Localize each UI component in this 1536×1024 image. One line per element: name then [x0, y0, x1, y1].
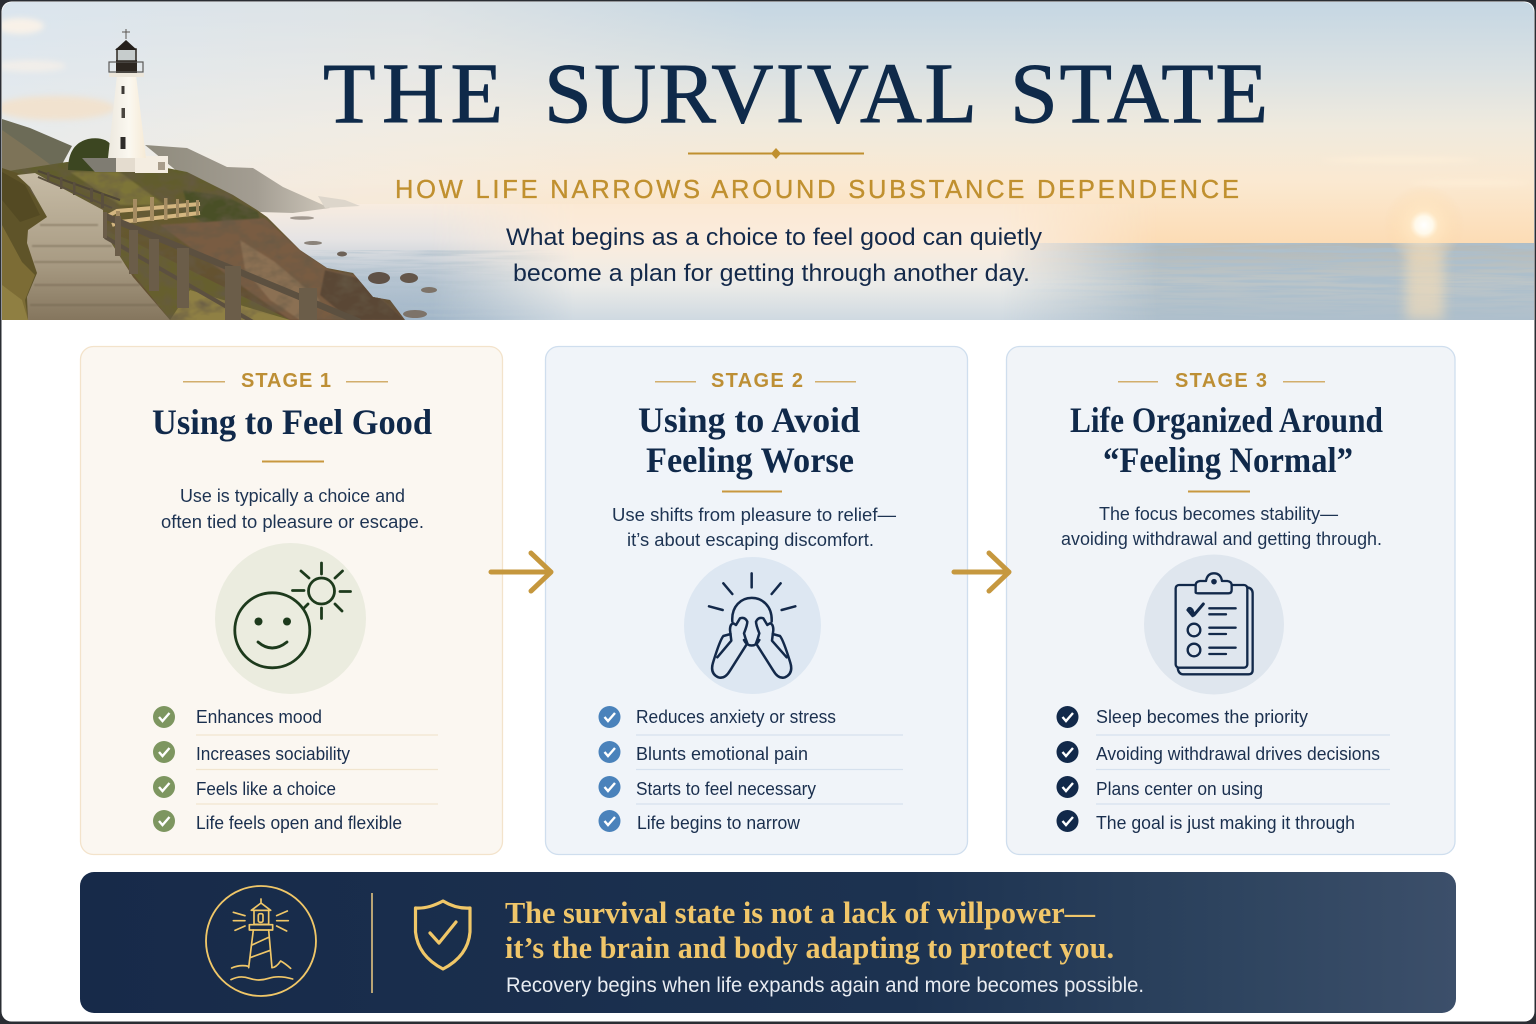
clouds: [2, 16, 114, 122]
stage 2 checklist: Starts to feel necessary: [636, 779, 816, 799]
stage 3 heading: [1070, 400, 1383, 480]
stage 3 description: [1061, 504, 1382, 549]
arrow: stage 2 to stage 3: [954, 553, 1009, 591]
panel: stage 1: [80, 346, 502, 854]
stage 2 checklist: Blunts emotional pain: [636, 744, 808, 764]
subtitle: HOW LIFE NARROWS AROUND SUBSTANCE DEPENDENCE: [395, 176, 1239, 204]
main cliff: [0, 160, 420, 320]
stage 3 checklist: [1056, 706, 1390, 833]
lighthouse: [82, 29, 168, 173]
sea, pale centre: [452, 204, 1143, 320]
intro text: What begins as a choice to feel good can quietly: [506, 224, 1043, 251]
stage 3 heading: Life Organized Around: [1070, 400, 1383, 440]
stage 3 description: The focus becomes stability—: [1099, 504, 1338, 524]
stage 1 heading: Using to Feel Good: [152, 402, 432, 442]
stage 3 heading: “Feeling Normal”: [1103, 440, 1353, 480]
stage 1 description: Use is typically a choice and: [180, 486, 405, 506]
title: THE: [323, 45, 503, 141]
sea, left bay: [264, 204, 562, 320]
stage 1 checklist: Feels like a choice: [196, 779, 336, 799]
icon: clipboard checklist: [1144, 554, 1284, 694]
tree: [68, 138, 112, 172]
stage 2 description: Use shifts from pleasure to relief—: [612, 505, 896, 525]
lit grass: [70, 172, 165, 205]
distant headlands: [145, 145, 330, 213]
icon: lighthouse badge: [206, 886, 316, 996]
stage 3 checklist: The goal is just making it through: [1096, 813, 1355, 833]
stage 2 label: STAGE 2: [711, 370, 803, 392]
stage 2 description: [612, 505, 896, 550]
stage 1 description: [161, 486, 424, 532]
callout headline: it’s the brain and body adapting to protect you.: [505, 930, 1114, 965]
stage 3 checklist: Sleep becomes the priority: [1096, 707, 1308, 727]
title: SURVIVAL: [544, 45, 977, 141]
icon: head held in hands: [684, 557, 821, 694]
stage 1 description: often tied to pleasure or escape.: [161, 512, 424, 532]
stage 3 label: STAGE 3: [1175, 370, 1267, 392]
stage 3 checklist: Avoiding withdrawal drives decisions: [1096, 744, 1380, 764]
stage 2 checklist: Life begins to narrow: [637, 813, 801, 833]
callout subtext: Recovery begins when life expands again and more becomes possible.: [506, 974, 1144, 997]
fence: [38, 171, 360, 322]
panel: stage 2: [546, 346, 968, 854]
stage 2 checklist: [598, 706, 903, 833]
stage 3 description: avoiding withdrawal and getting through.: [1061, 529, 1382, 549]
callout banner: [80, 872, 1456, 1013]
callout headline: The survival state is not a lack of willpower—: [505, 895, 1096, 930]
offshore rocks: [290, 216, 437, 318]
divider: [371, 893, 373, 993]
sun and reflection: [1406, 250, 1444, 320]
hero photo: lighthouse on coastal cliff at sunset: [0, 0, 1536, 322]
stage 2 heading: [638, 400, 860, 480]
title: STATE: [1010, 45, 1268, 141]
icon: shield with check: [416, 901, 470, 969]
grass under fence: [121, 246, 288, 320]
stage 1 checklist: Increases sociability: [196, 744, 350, 764]
rock faces: [162, 218, 381, 320]
intro text: become a plan for getting through another day.: [513, 260, 1030, 287]
path: [17, 173, 170, 320]
sea, right: [1016, 243, 1534, 320]
callout headline: [505, 895, 1114, 965]
stage 1 checklist: Life feels open and flexible: [196, 813, 402, 833]
stage 3 checklist: Plans center on using: [1096, 779, 1263, 799]
arrow: stage 1 to stage 2: [491, 553, 551, 591]
intro text: [506, 224, 1043, 287]
stage 1 checklist: [153, 706, 438, 833]
stage 1 label: STAGE 1: [241, 370, 331, 392]
left bushes: [2, 168, 47, 320]
stage 2 heading: Using to Avoid: [638, 400, 860, 440]
stage 2 heading: Feeling Worse: [646, 440, 854, 480]
stage 2 description: it’s about escaping discomfort.: [627, 530, 874, 550]
title divider with diamond: [688, 148, 864, 159]
title: [323, 45, 1268, 141]
icon: smiling face with sun: [215, 543, 366, 694]
stage 1 checklist: Enhances mood: [196, 707, 322, 727]
panel: stage 3: [1006, 346, 1455, 854]
stage 2 checklist: Reduces anxiety or stress: [636, 707, 836, 727]
